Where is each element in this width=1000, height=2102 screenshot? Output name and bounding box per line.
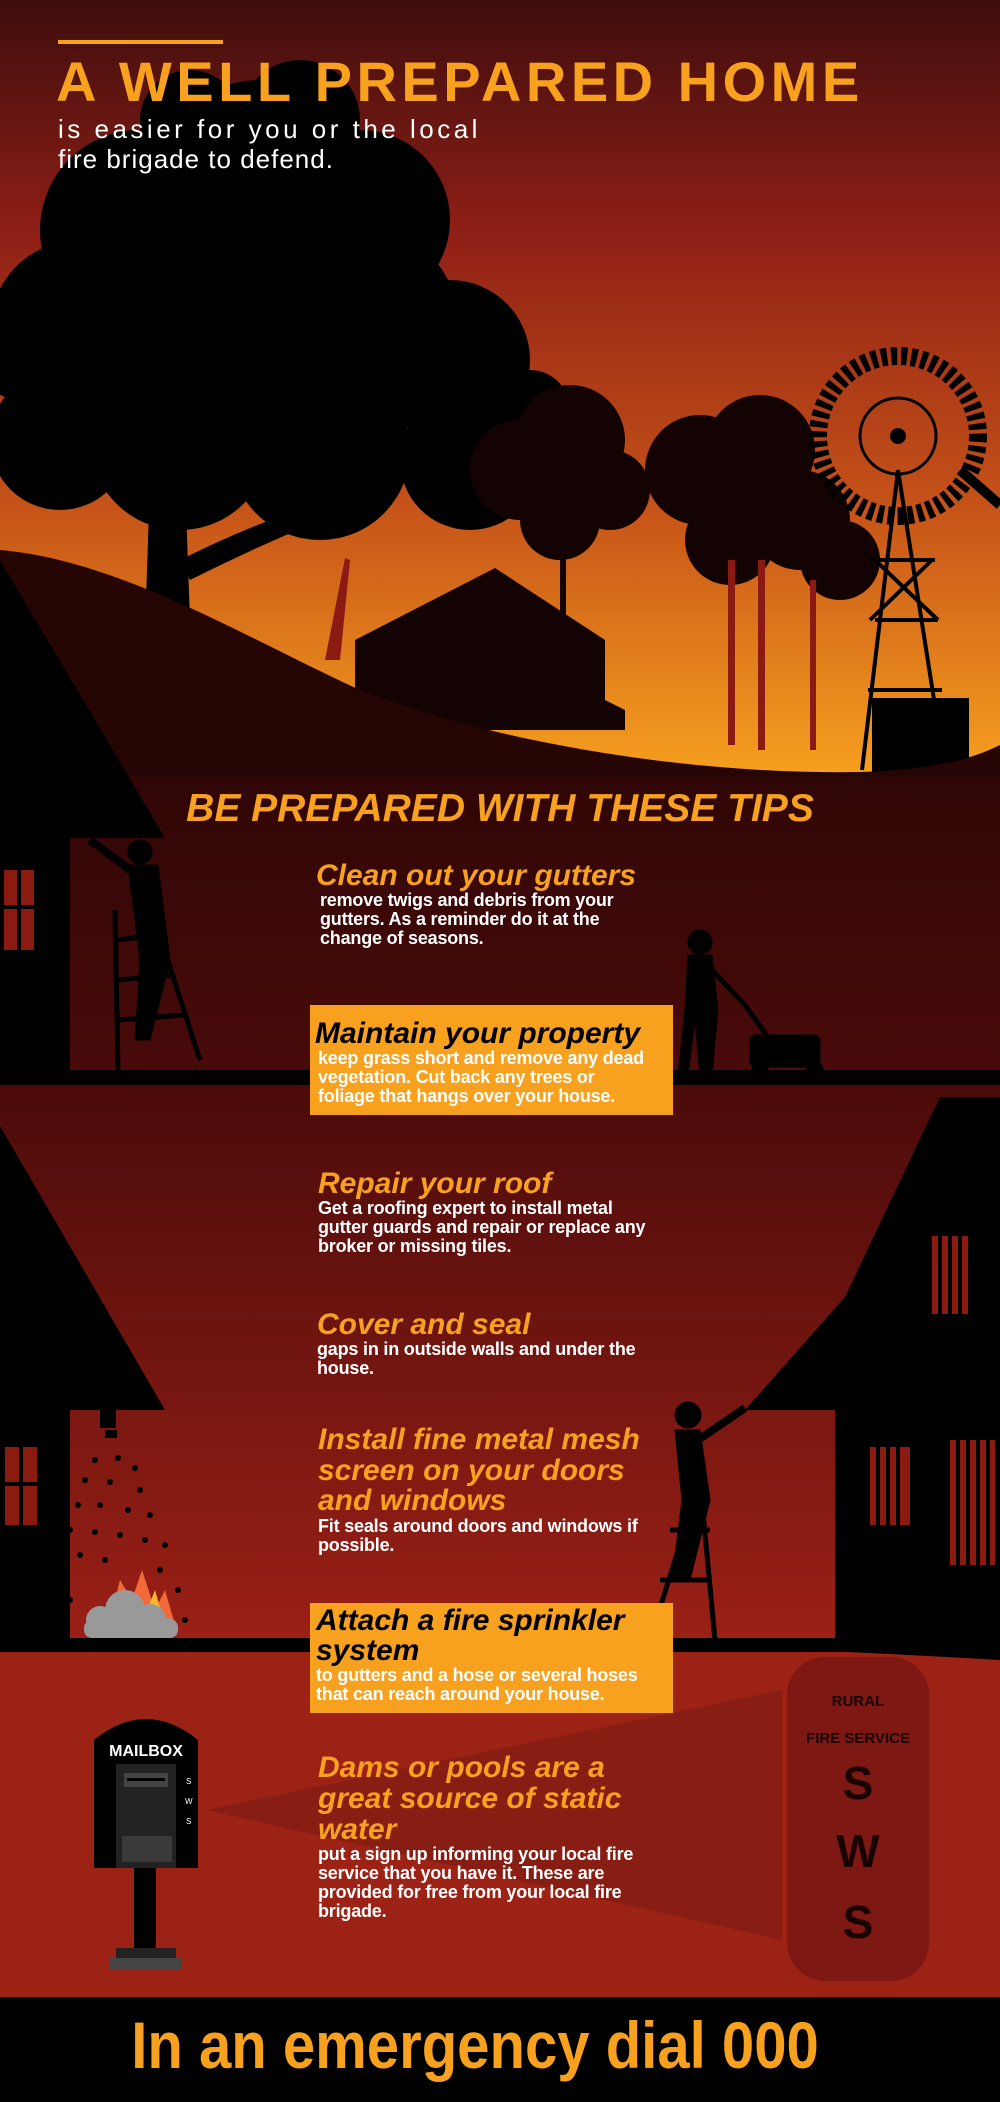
tip: gutters: change of seasons.	[320, 928, 483, 948]
tip: cover and seal	[317, 1308, 635, 1378]
sprinkler with drops and fire	[57, 1410, 188, 1623]
tip: mesh: Install fine metal mesh	[318, 1423, 640, 1456]
tip: roof: broker or missing tiles.	[318, 1236, 511, 1256]
tip: dams: brigade.	[318, 1901, 386, 1921]
tip: mesh	[318, 1423, 640, 1555]
tip: roof	[318, 1167, 646, 1256]
middle section	[0, 1083, 1000, 1643]
top rule	[58, 40, 223, 44]
tip: mesh: possible.	[318, 1534, 394, 1554]
big tree	[0, 60, 570, 630]
ground line top	[0, 1070, 1000, 1085]
title: A WELL PREPARED HOME	[56, 50, 864, 113]
lower section	[0, 1642, 1000, 1997]
mailbox: W	[185, 1797, 193, 1806]
mailbox: S	[186, 1817, 191, 1826]
tip: gutters: Clean out your gutters	[316, 859, 636, 892]
sign: rural fire service: W	[836, 1825, 880, 1877]
tip: mesh: Fit seals around doors and windows if	[318, 1516, 638, 1536]
mailbox: MAILBOX	[109, 1743, 183, 1760]
tip: sprinkler	[310, 1603, 673, 1713]
mailbox: S	[186, 1777, 191, 1786]
tip: dams: provided for free from your local fire	[318, 1882, 621, 1902]
tip: sprinkler: Attach a fire sprinkler	[316, 1604, 624, 1637]
tip: roof: Get a roofing expert to install metal	[318, 1198, 613, 1218]
light beam	[205, 1690, 782, 1940]
tip: roof: gutter guards and repair or replace any	[318, 1217, 645, 1237]
section heading: BE PREPARED WITH THESE TIPS	[186, 787, 814, 830]
tip: maintain property: keep grass short and remove any dead	[318, 1048, 644, 1068]
tip: sprinkler: that can reach around your house.	[316, 1684, 604, 1704]
right house middle	[745, 1097, 1000, 1642]
tip: gutters	[316, 859, 636, 948]
small trees	[470, 385, 880, 620]
tip: roof: Repair your roof	[318, 1167, 551, 1200]
hill	[0, 550, 1000, 790]
dark band	[0, 777, 1000, 1083]
tip: sprinkler: system	[316, 1634, 419, 1667]
sign: rural fire service	[787, 1657, 929, 1981]
tip: cover and seal: Cover and seal	[317, 1308, 530, 1341]
subtitle: fire brigade to defend.	[58, 144, 334, 174]
tip: mesh: screen on your doors	[318, 1454, 625, 1486]
sign: rural fire service: FIRE SERVICE	[806, 1730, 910, 1747]
tip: mesh: and windows	[318, 1484, 506, 1517]
tip: dams: great source of static	[318, 1782, 621, 1815]
subtitle	[58, 114, 481, 174]
farmhouse	[355, 568, 625, 730]
tip: dams: Dams or pools are a	[318, 1751, 605, 1784]
person on ladder	[90, 840, 200, 1070]
tip: maintain property	[310, 1005, 673, 1115]
left house top	[0, 560, 165, 1083]
footer: In an emergency dial 000	[131, 2008, 819, 2082]
tip: dams: service that you have it. These are	[318, 1863, 604, 1883]
tip: dams: put a sign up informing your local fire	[318, 1844, 633, 1864]
tip: dams	[318, 1751, 633, 1921]
tip: maintain property: vegetation. Cut back any trees or	[318, 1067, 594, 1087]
footer	[0, 1997, 1000, 2102]
tip: cover and seal: gaps in in outside walls and under the	[317, 1339, 635, 1359]
tip: gutters: remove twigs and debris from your	[320, 890, 613, 910]
sign: rural fire service: RURAL	[832, 1693, 884, 1710]
mailbox	[94, 1719, 198, 1970]
tip: maintain property: Maintain your property	[315, 1017, 640, 1050]
windmill	[818, 356, 1000, 770]
subtitle: is easier for you or the local	[58, 114, 481, 144]
tip: gutters: gutters. As a reminder do it at the	[320, 909, 599, 929]
person mowing	[678, 930, 823, 1078]
tip: maintain property: foliage that hangs over your house.	[318, 1086, 615, 1106]
sign: rural fire service: S	[843, 1757, 873, 1809]
sky	[0, 0, 1000, 780]
tip: dams: water	[318, 1813, 396, 1846]
tip: cover and seal: house.	[317, 1358, 374, 1378]
tip: sprinkler: to gutters and a hose or several hoses	[316, 1665, 638, 1685]
sign: rural fire service: S	[843, 1896, 873, 1948]
left house middle	[0, 1126, 165, 1642]
person on ladder middle	[650, 1402, 745, 1640]
